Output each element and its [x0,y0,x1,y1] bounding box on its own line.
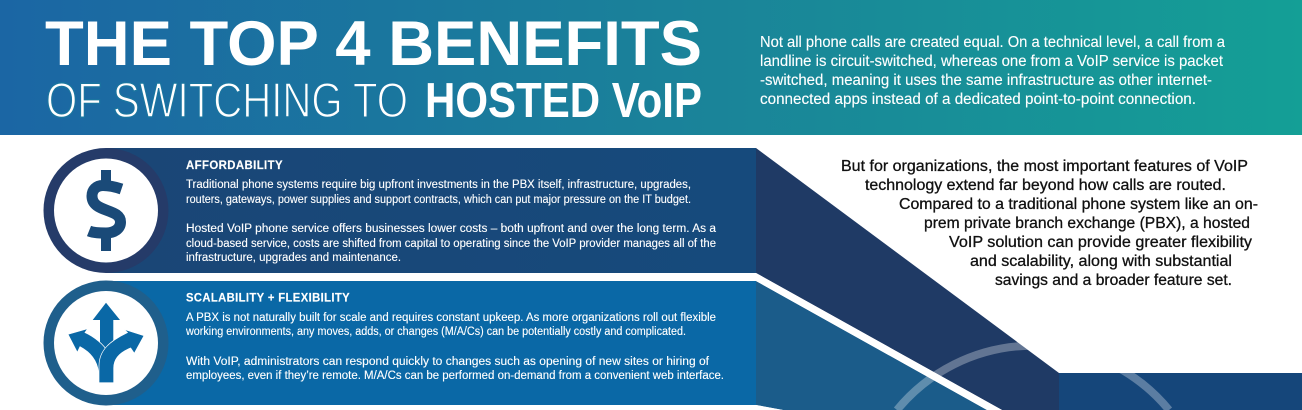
icon: dollar sign [44,148,168,273]
paragraph: organizations: Compared to a traditional phone system like an on- [899,196,1258,213]
intro paragraph [760,34,1225,108]
intro paragraph: landline is circuit-switched, whereas one from a VoIP service is packet [760,53,1224,70]
body text: affordability: cloud-based service, costs are shifted from capital to operating since the VoIP provider manages all of the [186,238,716,250]
intro paragraph: connected apps instead of a dedicated point-to-point connection. [760,91,1196,108]
heading: scalability and flexibility: SCALABILITY + FLEXIBILITY [186,292,350,304]
body text: scalability and flexibility: employees, even if they’re remote. M/A/Cs can be performed on-demand from a convenient web interface. [186,370,724,382]
icon: three-way arrows [44,280,168,406]
body text: affordability: routers, gateways, power supplies and support contracts, which can put major pressure on the IT budget. [186,194,691,206]
diagonal connector shapes [756,148,1302,410]
body text: scalability and flexibility: working environments, any moves, adds, or changes (M/A/Cs) can be potentially costly and complicated. [185,326,686,338]
paragraph: organizations: But for organizations, the most important features of VoIP [841,158,1248,175]
panel: scalability and flexibility [44,280,756,406]
body text: affordability: Hosted VoIP phone service offers businesses lower costs – both upfront and over the long term. As a [186,223,717,235]
body text: scalability and flexibility: With VoIP, administrators can respond quickly to changes such as opening of new sites or hiring of [186,356,710,368]
title: HOSTED VoIP [425,74,702,128]
body text: scalability and flexibility [185,312,724,382]
panel: affordability [44,148,756,273]
header banner [0,0,1302,135]
body text: affordability: Traditional phone systems require big upfront investments in the PBX itself, infrastructure, upgrades, [186,179,691,191]
body text: affordability: infrastructure, upgrades and maintenance. [186,252,401,264]
title: OF SWITCHING TO [46,74,408,128]
paragraph: organizations: and scalability, along with substantial [970,253,1232,270]
paragraph: organizations: VoIP solution can provide greater flexibility [949,234,1252,251]
intro paragraph: -switched, meaning it uses the same infrastructure as other internet- [760,72,1212,89]
heading: affordability: AFFORDABILITY [186,160,283,172]
body text: affordability [186,179,717,264]
title: THE TOP 4 BENEFITS [45,9,702,79]
intro paragraph: Not all phone calls are created equal. On a technical level, a call from a [760,34,1225,51]
paragraph: organizations: technology extend far beyond how calls are routed. [865,177,1226,194]
title [45,9,702,128]
body text: scalability and flexibility: A PBX is not naturally built for scale and requires constant upkeep. As more organizations roll out flexible [186,312,716,324]
paragraph: organizations: savings and a broader feature set. [995,272,1232,289]
paragraph: organizations: prem private branch exchange (PBX), a hosted [924,215,1250,232]
paragraph: organizations [841,158,1258,289]
